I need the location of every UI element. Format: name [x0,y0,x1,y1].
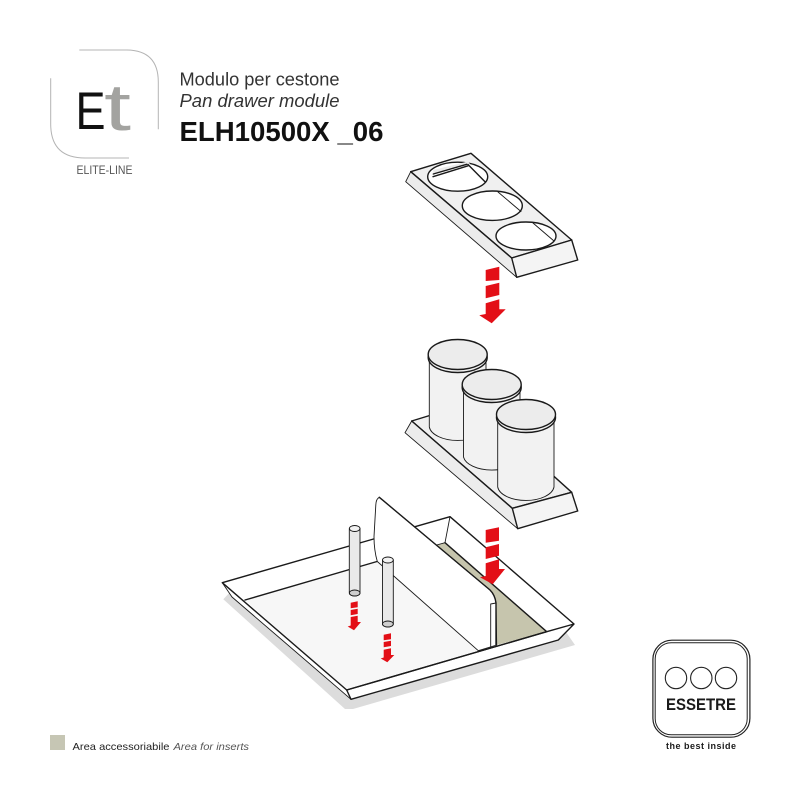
logo: Elite-Line Et badge: t [104,70,131,144]
legend: accessible area: Area for inserts [172,741,250,753]
top tray with three holes [406,153,578,277]
logo: Essetre: the best inside [666,741,736,751]
arrow: tray down onto cylinders [479,267,506,323]
hole 2 [462,191,522,220]
arrow: pin 2 down [381,633,394,662]
hole 1 [428,162,488,191]
drawer floor [245,543,547,690]
title block: Pan drawer module [180,91,340,111]
pin 1 [349,526,360,596]
drawer shadow [223,590,575,709]
pan drawer with divider [222,497,574,699]
pin 2 [382,557,393,627]
divider panel [374,497,497,651]
drawer outlines [222,517,574,699]
logo: Essetre [653,640,750,751]
logo: Essetre: ESSETRE [666,696,736,714]
arrow: pin 1 down [348,601,361,630]
cylinder 3 [496,400,556,500]
drawer body [222,517,574,699]
logo: Elite-Line Et badge [51,50,158,177]
middle tray with cylinders [405,340,578,529]
cylinder 1 [428,340,487,440]
title block [180,70,384,147]
legend: accessible area [50,735,250,753]
beige accessible area [437,543,547,645]
cylinder 2 [462,370,521,470]
arrow: cylinders down into drawer [480,527,505,584]
logo: Elite-Line Et badge: ELITE-LINE [76,165,133,177]
title block: ELH10500X _06 [180,116,384,147]
hole 3 [496,222,556,250]
title block: Modulo per cestone [180,70,340,90]
legend: accessible area: Area accessoriabile [72,741,170,753]
logo: Elite-Line Et badge: E [76,82,106,141]
